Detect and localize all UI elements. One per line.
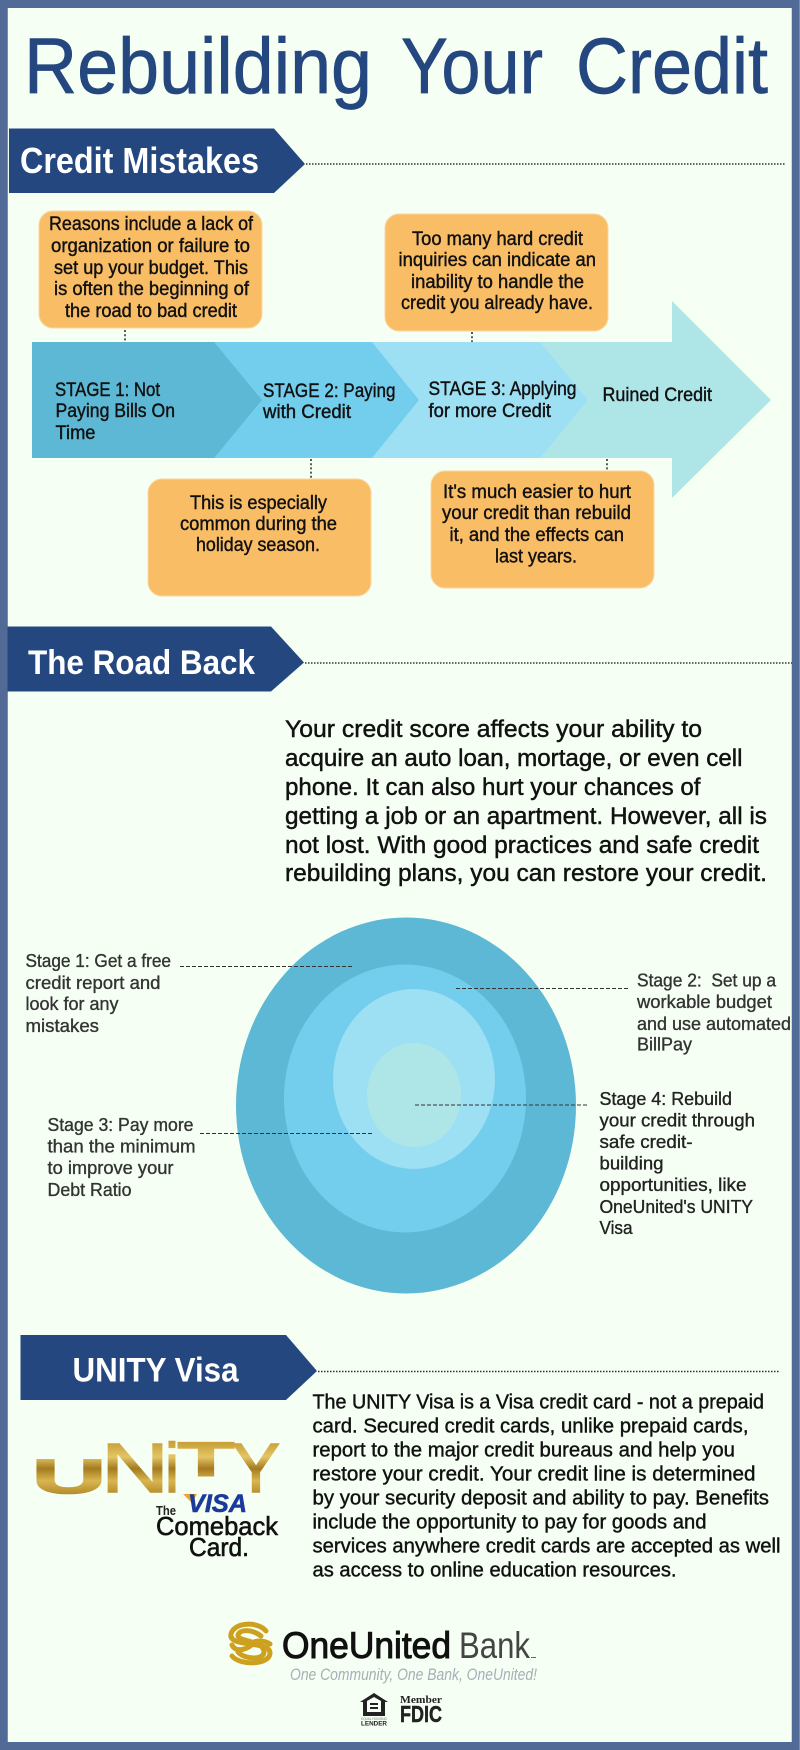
label: stage 3: [48, 1114, 196, 1200]
logo: oneunited bank: Bank: [459, 1625, 530, 1666]
stage arrow: Ruined Credit: [602, 385, 713, 406]
logo: oneunited bank: OneUnited: [282, 1625, 451, 1666]
logo: unity visa card: i: [165, 1429, 179, 1507]
label: stage 4: [600, 1088, 755, 1238]
label: stage 2: Stage 2: Set up a: [637, 970, 777, 990]
callout: hard inquiries: inquiries can indicate an: [398, 250, 596, 271]
label: stage 1: mistakes: [26, 1015, 99, 1036]
icon: equal housing lender: LENDER: [361, 1720, 387, 1728]
callout: reasons: organization or failure to: [51, 236, 250, 257]
stage arrow: Time: [56, 423, 96, 444]
callout: hurt credit: [431, 471, 654, 588]
unity visa description: restore your credit. Your credit line is determined: [312, 1464, 756, 1486]
title: Your: [401, 21, 543, 110]
banner: unity visa: UNITY Visa: [72, 1352, 239, 1390]
callout: holiday season: [148, 479, 371, 596]
unity visa description: as access to online education resources.: [312, 1560, 676, 1582]
tagline: One Community, One Bank, OneUnited!: [290, 1665, 537, 1684]
callout: holiday season: This is especially: [190, 493, 327, 514]
logo: unity visa card: The: [156, 1503, 176, 1518]
stage arrow: STAGE 1: Not: [55, 380, 161, 401]
callout: hard inquiries: inability to handle the: [411, 272, 584, 293]
icon: equal housing lender: EQUAL HOUSING: [361, 1716, 387, 1721]
intro paragraph: acquire an auto loan, mortage, or even cell: [285, 745, 742, 772]
intro paragraph: phone. It can also hurt your chances of: [285, 774, 701, 801]
callout: reasons: Reasons include a lack of: [49, 214, 254, 235]
callout: holiday season: common during the: [180, 514, 337, 535]
callout: holiday season: holiday season.: [196, 535, 320, 556]
callout: hurt credit: it, and the effects can: [450, 525, 624, 546]
stage arrow: for more Credit: [428, 401, 552, 422]
callout: hard inquiries: credit you already have.: [401, 293, 593, 314]
label: stage 4: your credit through: [600, 1110, 755, 1130]
label: stage 4: Visa: [600, 1217, 633, 1238]
label: stage 4: OneUnited's UNITY: [600, 1196, 753, 1217]
stage arrow: STAGE 3: Applying: [428, 379, 576, 400]
callout: hurt credit: last years.: [495, 546, 577, 568]
callout: reasons: the road to bad credit: [65, 301, 238, 322]
label: stage 4: Stage 4: Rebuild: [600, 1088, 732, 1109]
logo: oneunited bank: [231, 1624, 537, 1728]
logo: unity visa card: U: [32, 1451, 106, 1504]
label: stage 4: building: [600, 1152, 664, 1174]
callout: hurt credit: It's much easier to hurt: [443, 482, 632, 503]
stage arrow: STAGE 2: Paying: [263, 381, 396, 402]
label: stage 2: [636, 970, 791, 1054]
unity visa description: [312, 1392, 780, 1582]
banner: unity visa: [20, 1335, 317, 1400]
icon: equal housing lender: [360, 1693, 388, 1728]
intro paragraph: rebuilding plans, you can restore your credit.: [285, 860, 767, 887]
icon: gold swirl: [231, 1624, 270, 1663]
banner: credit mistakes: Credit Mistakes: [20, 140, 259, 181]
logo: unity visa card: Card.: [189, 1532, 249, 1562]
unity visa description: include the opportunity to pay for goods and: [312, 1512, 706, 1534]
label: stage 2: and use automated: [637, 1013, 791, 1034]
section: unity visa: [20, 1335, 780, 1582]
title: Rebuilding: [24, 21, 372, 110]
callout: reasons: [39, 211, 262, 328]
icon: member fdic: [400, 1694, 442, 1727]
intro paragraph: [285, 716, 767, 887]
label: stage 2: workable budget: [636, 991, 772, 1012]
unity visa description: card. Secured credit cards, unlike prepaid cards,: [312, 1416, 748, 1438]
banner: the road back: [8, 626, 304, 692]
label: stage 1: credit report and: [26, 972, 160, 993]
label: stage 1: Stage 1: Get a free: [26, 950, 171, 971]
intro paragraph: Your credit score affects your ability to: [285, 716, 702, 743]
callout: hard inquiries: Too many hard credit: [412, 229, 584, 250]
callout: hurt credit: your credit than rebuild: [442, 503, 631, 524]
stage arrow: Paying Bills On: [56, 401, 175, 422]
logo: unity visa card: N: [101, 1429, 169, 1507]
logo: unity visa card: VISA: [188, 1490, 247, 1518]
concentric ellipses chart: [236, 918, 576, 1294]
label: stage 1: [26, 950, 171, 1036]
stage arrow: [32, 301, 771, 498]
banner: the road back: The Road Back: [28, 644, 255, 682]
stage arrow: with Credit: [262, 402, 352, 423]
label: stage 4: opportunities, like: [600, 1174, 746, 1195]
title: Credit: [576, 21, 768, 110]
intro paragraph: getting a job or an apartment. However, all is: [285, 803, 767, 830]
label: stage 3: to improve your: [48, 1157, 174, 1178]
label: stage 1: look for any: [26, 993, 119, 1014]
callout: hard inquiries: [385, 214, 608, 331]
title: [24, 21, 768, 110]
logo: unity visa card: Y: [232, 1429, 280, 1507]
logo: unity visa card: T: [178, 1434, 234, 1487]
callout: reasons: is often the beginning of: [54, 279, 250, 300]
unity visa description: report to the major credit bureaus and help you: [312, 1440, 735, 1462]
icon: member fdic: Member: [400, 1694, 442, 1706]
logo: unity visa card: [32, 1429, 280, 1562]
intro paragraph: not lost. With good practices and safe credit: [285, 832, 759, 859]
icon: member fdic: FDIC: [400, 1701, 442, 1727]
section: the road back: [8, 626, 792, 1294]
unity visa description: services anywhere credit cards are accepted as well: [312, 1536, 780, 1558]
label: stage 3: Stage 3: Pay more: [48, 1114, 194, 1135]
unity visa description: by your security deposit and ability to pay. Benefits: [312, 1488, 769, 1510]
section: credit mistakes: [9, 128, 785, 596]
label: stage 3: than the minimum: [48, 1136, 196, 1156]
logo: unity visa card: Comeback: [156, 1511, 279, 1541]
label: stage 4: safe credit-: [600, 1131, 692, 1152]
label: stage 3: Debt Ratio: [48, 1179, 132, 1200]
label: stage 2: BillPay: [637, 1034, 693, 1054]
unity visa description: The UNITY Visa is a Visa credit card - not a prepaid: [312, 1392, 764, 1414]
banner: credit mistakes: [9, 128, 305, 193]
callout: reasons: set up your budget. This: [54, 258, 248, 279]
